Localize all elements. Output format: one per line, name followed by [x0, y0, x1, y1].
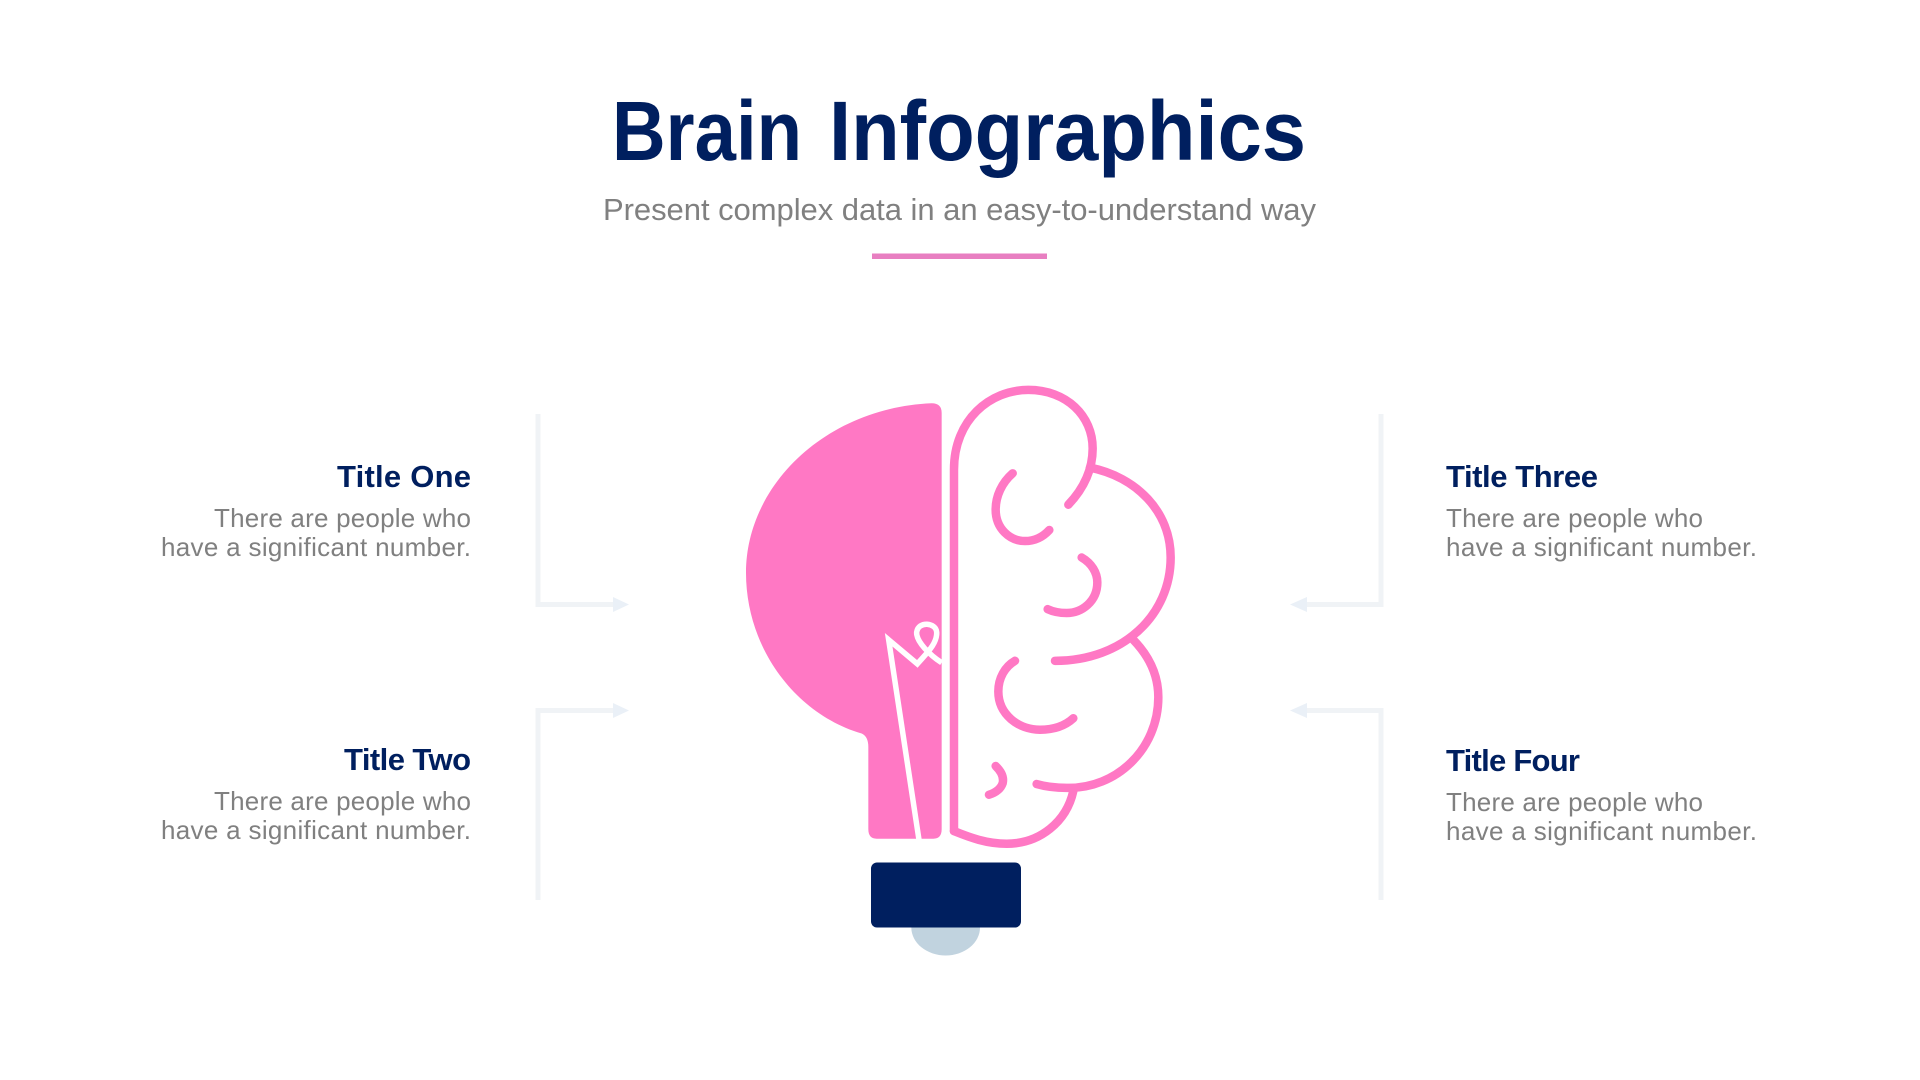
text block: title three: Title Three [1446, 459, 1598, 494]
text block: title four: There are people who [1446, 787, 1703, 817]
text block: title one [161, 459, 471, 562]
text block: title four: Title Four [1446, 743, 1580, 778]
arrow: connector title one [538, 414, 629, 612]
text block: title two: Title Two [344, 742, 471, 777]
text block: title three [1446, 459, 1757, 562]
left half: solid bulb [746, 403, 942, 839]
text block: title one: Title One [337, 459, 471, 494]
title: Infographics [829, 84, 1306, 178]
subtitle: Present complex data in an easy-to-understand way [603, 192, 1316, 227]
text block: title two [161, 742, 471, 845]
bulb base [871, 862, 1021, 928]
text block: title two: There are people who [214, 786, 471, 816]
text block: title four: have a significant number. [1446, 816, 1757, 846]
title underline [872, 254, 1047, 259]
filament [889, 624, 942, 840]
arrow: connector title four [1290, 703, 1381, 900]
title: Brain [612, 84, 802, 178]
text block: title one: There are people who [214, 503, 471, 533]
text block: title two: have a significant number. [161, 815, 471, 845]
text block: title three: There are people who [1446, 503, 1703, 533]
text block: title four [1446, 743, 1757, 846]
right half: brain outline [954, 390, 1171, 844]
arrow: connector title three [1290, 414, 1381, 612]
bulb socket shadow [911, 900, 980, 955]
arrow: connector title two [538, 703, 629, 900]
text block: title three: have a significant number. [1446, 532, 1757, 562]
title [612, 84, 1306, 178]
icon: brain light bulb [746, 390, 1171, 955]
text block: title one: have a significant number. [161, 532, 471, 562]
